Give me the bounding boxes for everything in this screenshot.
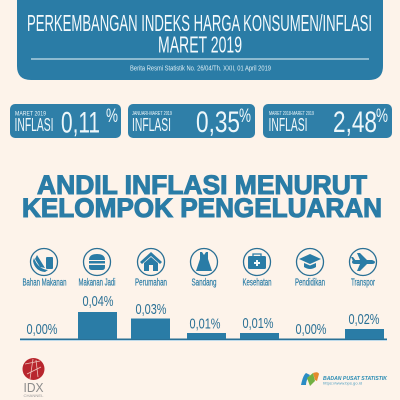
category labels: Kesehatan (242, 278, 272, 288)
panel: inflation January to March 2019 (128, 104, 255, 139)
panel: inflation March 2019: % (106, 106, 118, 127)
logo: IDX Channel: IDX (24, 380, 44, 395)
bar values: 0,02% (348, 311, 380, 328)
title (27, 10, 372, 58)
subtitle: Berita Resmi Statistik No. 26/04/Th. XXII, 01 April 2019 (130, 66, 271, 72)
heading: ANDIL INFLASI MENURUT (37, 170, 367, 200)
panel: inflation January to March 2019: JANUARI-MARET 2019 (132, 111, 172, 117)
category labels: Transpor (351, 278, 375, 288)
panel: inflation March 2019 (10, 104, 121, 140)
bar values: 0,01% (242, 315, 274, 332)
panel: inflation March 2019: 0,11 (61, 106, 100, 140)
panel: inflation March 2018 to March 2019: 2,48 (333, 106, 377, 139)
panel: header (17, 0, 383, 80)
logo: IDX Channel: CHANNEL (24, 393, 44, 398)
bar values: 0,01% (190, 316, 220, 332)
panel: inflation March 2019: INFLASI (14, 115, 54, 135)
icon: food ingredients (30, 248, 58, 276)
heading: KELOMPOK PENGELUARAN (22, 193, 382, 223)
panel: inflation March 2018 to March 2019: MARET 2018-MARET 2019 (269, 111, 314, 117)
panel: inflation March 2018 to March 2019: % (376, 106, 388, 127)
title: MARET 2019 (158, 32, 242, 58)
logo: Badan Pusat Statistik: BADAN PUSAT STATISTIK (323, 376, 388, 382)
bar chart (20, 293, 387, 341)
icon: dress (190, 248, 218, 276)
bar values: 0,03% (136, 301, 166, 318)
icon: burger (84, 248, 110, 276)
logo: Badan Pusat Statistik (301, 372, 388, 386)
icon: medical case (244, 248, 270, 276)
logo: Badan Pusat Statistik: https://www.bps.go.id (323, 380, 362, 386)
panel: inflation January to March 2019: % (239, 106, 251, 127)
category labels: Bahan Makanan (22, 278, 66, 288)
category labels: Pendidikan (295, 278, 325, 288)
panel: inflation March 2018 to March 2019 (263, 104, 392, 139)
bar values: 0,04% (82, 293, 114, 310)
icon: graduation cap (296, 248, 324, 276)
bar values: 0,00% (26, 321, 58, 338)
category labels: Sandang (192, 278, 216, 288)
panel: inflation March 2018 to March 2019: INFLASI (268, 115, 308, 135)
bar values: 0,00% (296, 321, 326, 338)
logo: IDX Channel (22, 358, 44, 398)
panel: inflation January to March 2019: INFLASI (132, 115, 171, 135)
category labels: Makanan Jadi (78, 278, 116, 288)
panel: inflation January to March 2019: 0,35 (196, 106, 240, 139)
category labels (22, 278, 375, 288)
bar values (26, 293, 380, 338)
panel: inflation March 2019: MARET 2019 (15, 110, 46, 118)
heading (22, 170, 382, 223)
category labels: Perumahan (135, 278, 167, 288)
icon: airplane (350, 248, 376, 276)
icon: house (138, 248, 164, 276)
